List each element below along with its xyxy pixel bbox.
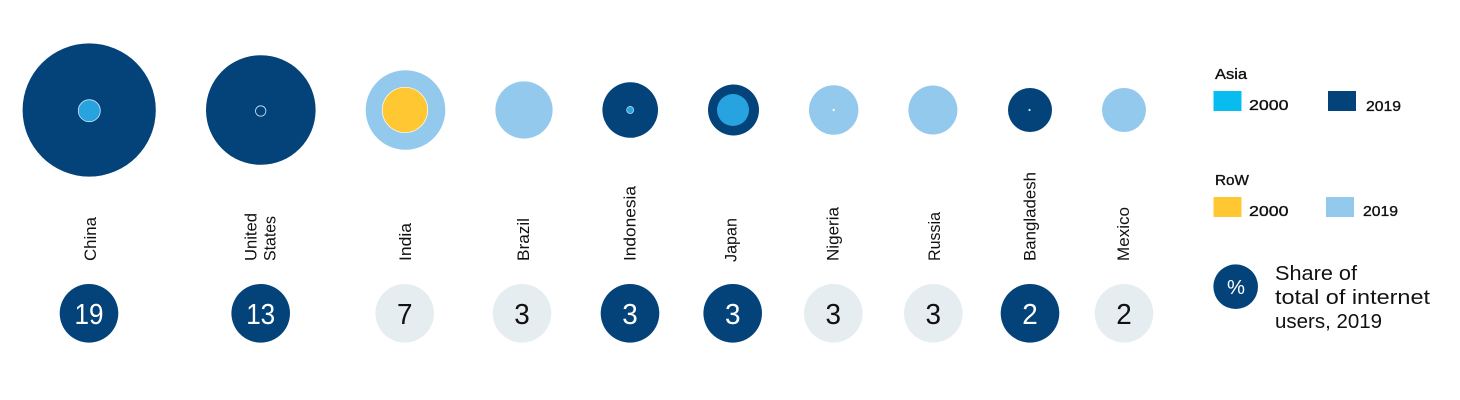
label: United States: States [261, 216, 280, 261]
legend: share of internet users: % [1227, 277, 1245, 299]
share value: Brazil [493, 284, 551, 343]
share value: Nigeria [804, 284, 863, 343]
circles: Indonesia [602, 82, 658, 138]
circles: Nigeria [809, 85, 858, 135]
share value: Indonesia [601, 284, 659, 343]
share value: Indonesia: 3 [622, 299, 638, 331]
legend: Asia: 2019 [1366, 99, 1401, 115]
legend: Asia: Asia [1215, 67, 1248, 83]
legend: share of internet users: Share of [1275, 262, 1357, 285]
label: Mexico: Mexico [1114, 207, 1133, 261]
share value: India: 7 [397, 299, 412, 331]
share value: Mexico [1095, 284, 1153, 343]
label: Bangladesh: Bangladesh [1020, 172, 1039, 261]
share value: India [375, 284, 434, 343]
label: Japan: Japan [722, 218, 741, 262]
share value: Mexico: 2 [1116, 299, 1132, 331]
share value: Japan [703, 284, 762, 343]
legend: RoW: 2000 [1249, 204, 1288, 220]
label: Russia: Russia [925, 211, 944, 261]
label: United States: United [242, 213, 261, 261]
share value: China: 19 [74, 299, 104, 331]
legend: share of internet users: total of internet [1275, 286, 1430, 309]
circles: United States [206, 55, 316, 165]
circles: India [366, 70, 445, 150]
circles: China [23, 43, 156, 177]
legend: Asia: 2000 [1249, 98, 1288, 114]
legend: share of internet users [1213, 262, 1430, 333]
label: Indonesia: Indonesia [620, 185, 639, 261]
circles: Brazil [495, 81, 553, 139]
legend: share of internet users: users, 2019 [1275, 310, 1382, 333]
share value: Russia: 3 [926, 299, 941, 331]
share value: Brazil: 3 [514, 299, 530, 331]
legend: RoW: RoW [1215, 173, 1249, 189]
share value: United States: 13 [246, 299, 275, 331]
share value: China [60, 284, 118, 343]
label: China: China [81, 216, 100, 261]
share value: Russia [904, 284, 963, 343]
circles: Japan [708, 84, 759, 136]
share value: Bangladesh: 2 [1022, 299, 1038, 331]
legend: Asia [1214, 67, 1401, 115]
label: Brazil: Brazil [514, 218, 533, 261]
label: India: India [396, 222, 415, 261]
share value: Nigeria: 3 [826, 299, 841, 331]
share value: Japan: 3 [725, 299, 740, 331]
circles: Bangladesh [1008, 88, 1052, 132]
share value: United States [231, 284, 290, 343]
legend: RoW: 2019 [1363, 204, 1398, 220]
legend: RoW [1214, 173, 1398, 220]
share value: Bangladesh [1001, 284, 1059, 343]
circles: Russia [908, 86, 957, 134]
label: Nigeria: Nigeria [824, 206, 843, 261]
circles: Mexico [1102, 88, 1146, 132]
